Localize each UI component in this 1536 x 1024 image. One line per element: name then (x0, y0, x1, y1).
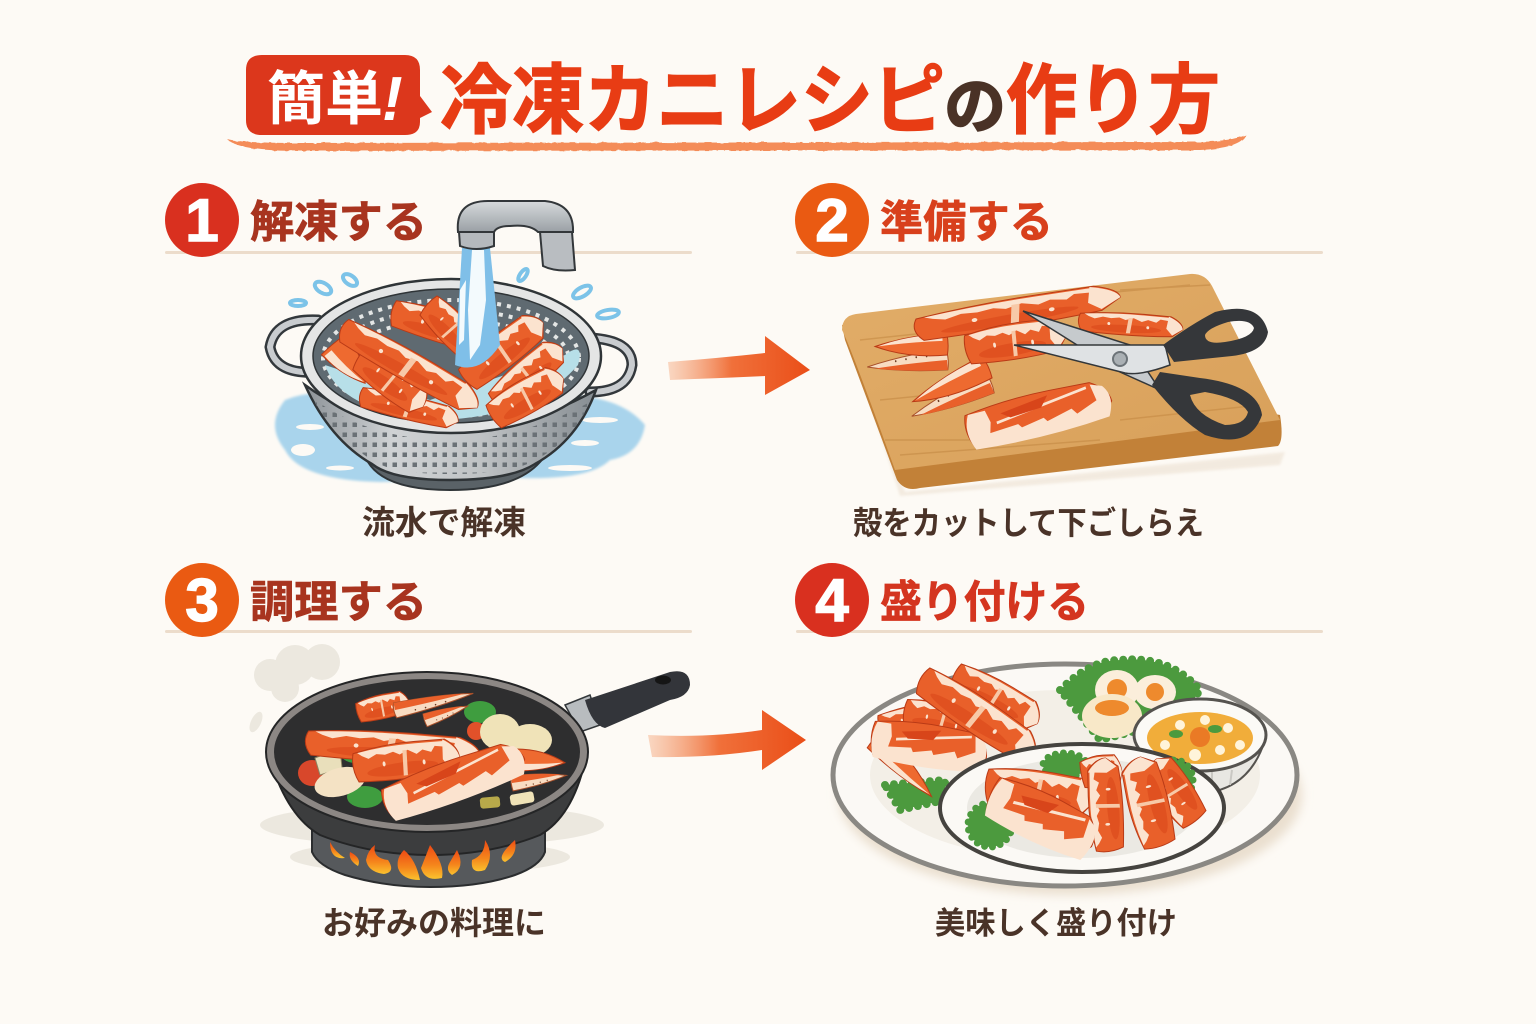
illustration: cutting board and scissors (842, 274, 1285, 496)
board edge (842, 325, 1282, 489)
number 4: 4 (815, 567, 849, 634)
wood grain (860, 285, 1260, 455)
burner (312, 825, 545, 887)
divider (796, 630, 1323, 633)
title (227, 55, 1246, 151)
number 1: 1 (185, 187, 219, 254)
title badge: 簡単 (267, 67, 383, 132)
handles (1163, 309, 1268, 362)
number 2: 2 (815, 187, 849, 254)
heading text: 解凍する (250, 198, 427, 247)
illustration: colander under running water (270, 201, 645, 490)
caption 4: 美味しく盛り付け (935, 906, 1177, 941)
caption 3: お好みの料理に (322, 905, 546, 941)
pan shadows (260, 803, 604, 874)
title particle: の (944, 73, 1006, 142)
title main text: 冷凍カニレシピ (440, 59, 945, 144)
puddle highlights (291, 417, 618, 471)
number 3: 3 (185, 567, 219, 634)
caption 2: 殻をカットして下ごしらえ (853, 505, 1204, 541)
divider (165, 630, 692, 633)
step 4 heading (795, 563, 1323, 637)
board shadow (850, 340, 1285, 496)
illustration: plated crab (833, 659, 1302, 895)
title underline (227, 135, 1246, 151)
plate well (870, 690, 1260, 860)
pivot (1113, 352, 1127, 366)
heading text: 盛り付ける (880, 578, 1089, 627)
vegetables (298, 701, 552, 809)
bowl foot (368, 462, 540, 490)
number 2 (795, 183, 869, 257)
illustration: frying pan on flame (247, 644, 690, 887)
handles (270, 320, 632, 392)
title badge: ! (382, 65, 403, 134)
arrow 3 to 4 (648, 710, 806, 770)
crab cakes (1082, 670, 1176, 738)
upper blade (1023, 311, 1160, 390)
scissors (1014, 309, 1268, 440)
inner plate well (967, 758, 1197, 858)
step 3 heading (165, 563, 692, 637)
outer plate (833, 664, 1297, 886)
heading text: 調理する (250, 578, 427, 627)
interior (313, 289, 589, 423)
caption 1: 流水で解凍 (362, 504, 526, 541)
lower blade (1014, 345, 1170, 374)
water in bowl (325, 349, 580, 420)
arrow 1 to 2 (668, 336, 810, 395)
title end text: 作り方 (1006, 59, 1220, 144)
crab legs on board (866, 280, 1183, 454)
food in pan (298, 686, 568, 826)
plate shadow (838, 695, 1302, 895)
flames (330, 840, 516, 880)
crab legs on outer plate (866, 660, 1047, 804)
step 2 heading (795, 183, 1323, 257)
pan body (268, 752, 587, 855)
title badge (246, 55, 432, 135)
lettuce lower left (885, 780, 945, 810)
inner plate (940, 744, 1224, 872)
water drops (290, 268, 620, 320)
bowl body (305, 385, 596, 480)
step 1 heading (165, 183, 692, 257)
pan rim (266, 672, 588, 832)
number 3 (165, 563, 239, 637)
water puddle (275, 394, 645, 482)
faucet (458, 201, 575, 270)
number 4 (795, 563, 869, 637)
board top (842, 274, 1280, 470)
heading text: 準備する (880, 198, 1053, 247)
water stream (455, 248, 500, 368)
sauce bowl (1134, 699, 1266, 793)
crab legs on inner plate (980, 751, 1210, 865)
inner lettuce (968, 753, 1193, 847)
rim (301, 279, 601, 433)
pan handle (565, 671, 690, 732)
interior holes (323, 300, 579, 416)
crab legs in bowl (321, 293, 571, 432)
divider (796, 251, 1323, 254)
number 1 (165, 183, 239, 257)
pan interior (274, 679, 580, 825)
steam (247, 644, 340, 734)
divider (165, 251, 692, 254)
lettuce upper right (1060, 659, 1200, 740)
